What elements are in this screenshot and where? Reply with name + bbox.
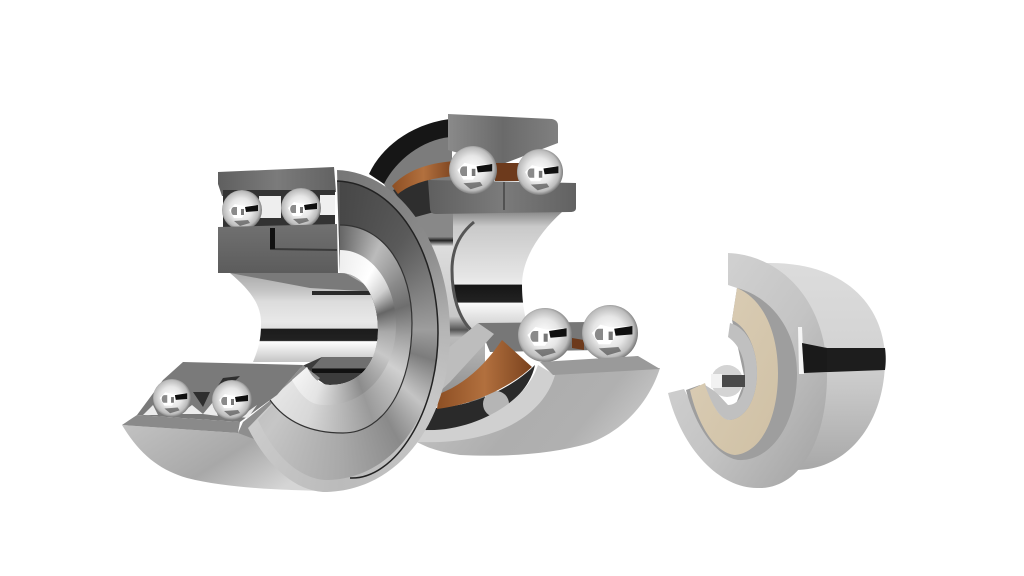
lower top surface bbox=[540, 356, 660, 375]
inner block bbox=[428, 180, 576, 214]
back cylinder dark band bbox=[800, 345, 886, 373]
back cylinder bbox=[760, 263, 885, 470]
bore rim bbox=[452, 222, 474, 332]
lower front strip bbox=[122, 415, 240, 433]
bottom back upper surface bbox=[478, 322, 600, 352]
top outer block bbox=[448, 114, 558, 165]
hole lower dark interior bbox=[300, 357, 382, 388]
lower end band bbox=[417, 365, 555, 442]
lower ball one bbox=[153, 379, 191, 417]
face groove lines bbox=[270, 225, 412, 433]
back bearing bbox=[369, 114, 660, 456]
top copper cage bbox=[392, 161, 455, 194]
back bearing inner raceway bbox=[384, 137, 452, 232]
face inner boss bbox=[292, 250, 396, 404]
lower ball two bbox=[212, 380, 252, 420]
right flanged piece bbox=[668, 253, 886, 488]
upper ball two bbox=[281, 188, 321, 228]
face middle ring bbox=[270, 226, 412, 432]
bore surface bbox=[453, 212, 562, 332]
upper ball one bbox=[222, 190, 262, 230]
upper ball cavity bbox=[223, 190, 335, 228]
lower cut backing bbox=[238, 365, 320, 442]
top dark cavity bbox=[393, 178, 434, 218]
lower front cylinder bbox=[417, 368, 660, 456]
bore top shadow bbox=[230, 273, 378, 292]
lower gray surface bbox=[137, 362, 303, 422]
bottom silver wedge bbox=[428, 323, 494, 394]
back bearing outer ring bbox=[369, 119, 450, 192]
lower ball two bbox=[582, 305, 638, 361]
inner ball bbox=[711, 365, 743, 397]
lower copper link bbox=[572, 338, 584, 350]
flange highlight bbox=[798, 327, 804, 374]
illustration: cutaway bearings bbox=[122, 114, 886, 492]
flange dark band bbox=[802, 343, 827, 373]
inner block bbox=[218, 224, 338, 273]
behind-disc bore bbox=[410, 212, 485, 402]
lower copper cage bbox=[437, 340, 532, 409]
inner shaded ring bbox=[686, 288, 797, 460]
top ball two bbox=[517, 149, 563, 195]
lower outer cylinder bbox=[122, 425, 330, 491]
face outer ring bbox=[258, 182, 438, 480]
front bore bbox=[230, 273, 382, 362]
hidden ball bbox=[483, 391, 509, 417]
upper outer block bbox=[218, 167, 336, 196]
front bearing bbox=[122, 167, 450, 492]
top ball one bbox=[449, 146, 497, 194]
flange body bbox=[668, 253, 827, 488]
between-ball copper bbox=[495, 163, 521, 181]
lower ball cavity bbox=[193, 376, 240, 407]
lower ball one bbox=[518, 308, 572, 362]
inner gray ring bbox=[705, 323, 757, 420]
beige composite ring bbox=[690, 288, 778, 455]
interior cavity bbox=[422, 365, 535, 432]
face silver rim bbox=[248, 170, 450, 492]
